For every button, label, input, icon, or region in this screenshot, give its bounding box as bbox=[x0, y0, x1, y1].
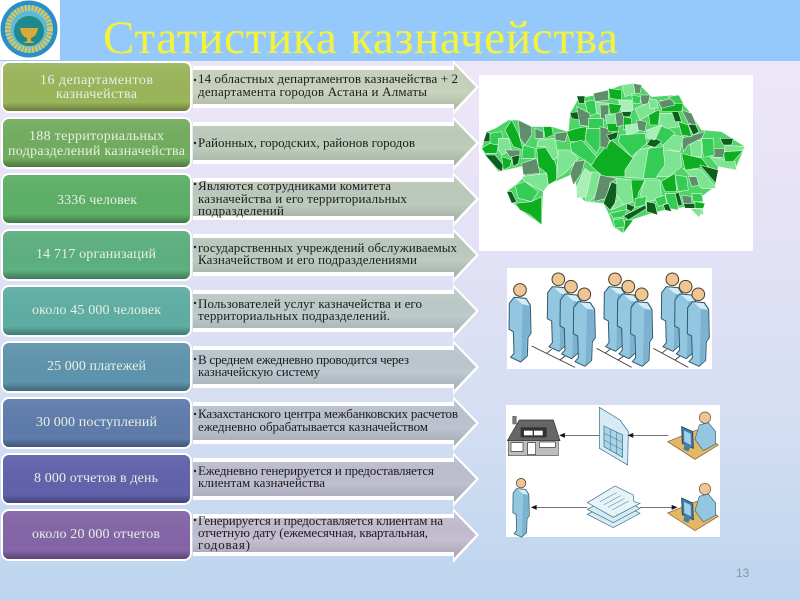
connector brackets bbox=[532, 346, 688, 367]
row 8 arrow bbox=[193, 452, 479, 507]
row 7 description bbox=[194, 406, 458, 434]
row 9 description bbox=[194, 513, 443, 552]
row 6 box: 25 000 платежей bbox=[47, 359, 146, 374]
row 2 box bbox=[1, 117, 192, 169]
row 1 box bbox=[1, 61, 192, 113]
title band bbox=[0, 0, 800, 61]
row 3 box bbox=[1, 173, 192, 225]
figures bbox=[509, 273, 709, 366]
row 5 description: территориальных подразделений. bbox=[198, 308, 390, 323]
row 8 box: 8 000 отчетов в день bbox=[34, 471, 158, 486]
title: Статистика казначейства bbox=[103, 12, 618, 64]
row 6 bbox=[1, 340, 479, 395]
row 3 arrow bbox=[193, 172, 479, 227]
panel: map of Kazakhstan districts bbox=[479, 75, 753, 251]
row 6 box bbox=[1, 341, 192, 393]
row 9 box bbox=[1, 509, 192, 561]
icon: workstation bottom bbox=[668, 483, 718, 531]
row 5 box bbox=[1, 285, 192, 337]
row 2 box: 188 территориальных bbox=[29, 129, 164, 144]
row 7 box bbox=[1, 397, 192, 449]
row 9 box: около 20 000 отчетов bbox=[32, 527, 160, 542]
arrows bbox=[532, 433, 677, 509]
panel: document flow diagram bbox=[506, 405, 720, 537]
row 2 description: Районных, городских, районов городов bbox=[198, 135, 415, 150]
row 1 description: департамента городов Астана и Алматы bbox=[198, 84, 427, 99]
row 3 description: подразделений bbox=[198, 203, 284, 218]
row 1 arrow bbox=[193, 60, 479, 115]
row 3 box: 3336 человек bbox=[57, 193, 137, 208]
logo emblem bbox=[0, 0, 60, 60]
row 3 description bbox=[194, 178, 408, 218]
row 4 description: государственных учреждений обслуживаемых bbox=[198, 240, 458, 255]
row 9 description: годовая) bbox=[198, 537, 250, 552]
row 8 description: Ежедневно генерируется и предоставляется bbox=[198, 463, 434, 478]
row 6 description bbox=[194, 352, 409, 379]
row 5 arrow bbox=[193, 284, 479, 339]
icon: spreadsheet document bbox=[599, 407, 628, 465]
row 6 description: казначейскую систему bbox=[198, 364, 320, 379]
row 1 box: 16 департаментов bbox=[40, 73, 153, 88]
icon: standing person bbox=[513, 478, 529, 537]
row 5 box: около 45 000 человек bbox=[32, 303, 161, 318]
row 7 description: Казахстанского центра межбанковских расчетов bbox=[198, 406, 458, 421]
row 4 box: 14 717 организаций bbox=[36, 247, 156, 262]
icon: paper stack bbox=[587, 486, 640, 528]
row 1 description: 14 областных департаментов казначейства + 2 bbox=[198, 71, 458, 86]
row 9 description: Генерируется и предоставляется клиентам на bbox=[198, 513, 443, 528]
row 7 arrow bbox=[193, 396, 479, 451]
row 8 description bbox=[194, 463, 434, 490]
panel: people org chart bbox=[507, 268, 712, 369]
row 5 description bbox=[194, 296, 422, 323]
row 8 description: клиентам казначейства bbox=[198, 475, 325, 490]
row 9 arrow bbox=[193, 508, 479, 563]
row 1 box: казначейства bbox=[56, 87, 138, 102]
row 1 bbox=[1, 60, 479, 115]
row 2 bbox=[1, 116, 479, 171]
row 4 description bbox=[194, 240, 458, 267]
row 1 description bbox=[194, 71, 458, 99]
page number: 13 bbox=[736, 566, 750, 580]
row 8 box bbox=[1, 453, 192, 505]
row 7 description: ежедневно обрабатывается казначейством bbox=[198, 419, 428, 434]
row 9 description: отчетную дату (ежемесячная, квартальная, bbox=[198, 525, 428, 540]
row 5 bbox=[1, 284, 479, 339]
row 6 description: В среднем ежедневно проводится через bbox=[198, 352, 409, 367]
icon: workstation top bbox=[668, 412, 718, 459]
icon: house bbox=[507, 416, 560, 456]
row 4 description: Казначейством и его подразделениями bbox=[198, 252, 417, 267]
row 9 bbox=[1, 508, 479, 563]
row 4 arrow bbox=[193, 228, 479, 283]
row 3 description: Являются сотрудниками комитета bbox=[198, 178, 391, 193]
row 6 arrow bbox=[193, 340, 479, 395]
row 3 description: казначейства и его территориальных bbox=[198, 191, 408, 206]
row 4 box bbox=[1, 229, 192, 281]
row 8 bbox=[1, 452, 479, 507]
row 2 arrow bbox=[193, 116, 479, 171]
row 3 bbox=[1, 172, 479, 227]
row 7 box: 30 000 поступлений bbox=[36, 415, 158, 430]
row 5 description: Пользователей услуг казначейства и его bbox=[198, 296, 422, 311]
row 7 bbox=[1, 396, 479, 451]
row 2 box: подразделений казначейства bbox=[8, 144, 186, 159]
row 4 bbox=[1, 228, 479, 283]
